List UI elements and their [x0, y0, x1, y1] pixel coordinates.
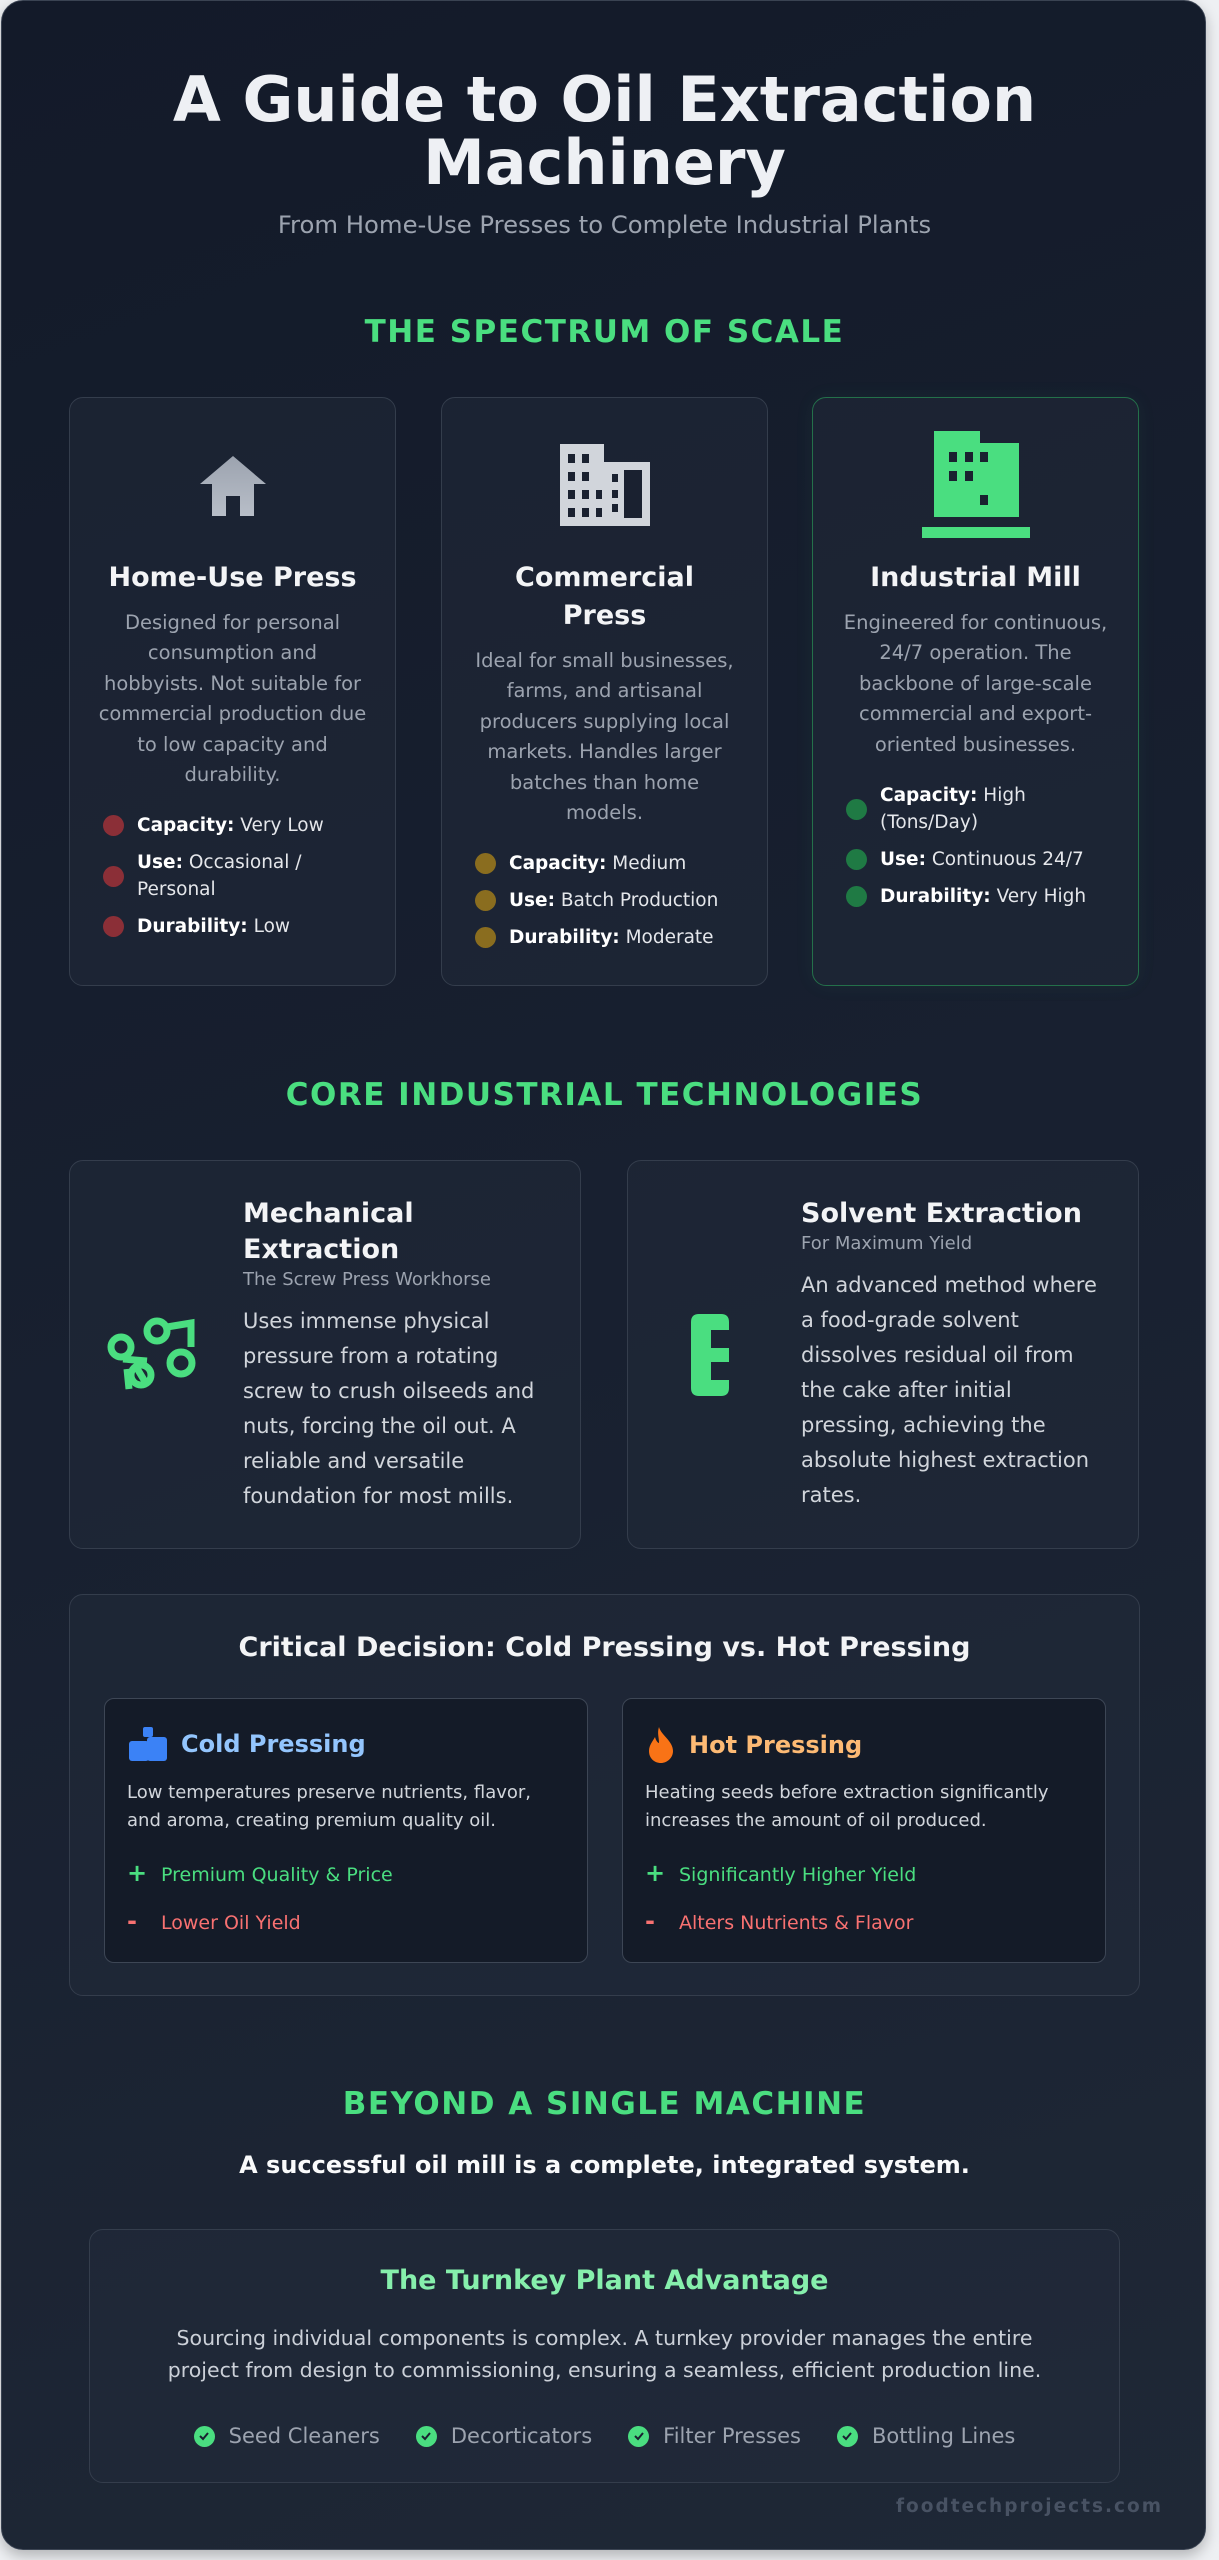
icon: industrial building	[922, 431, 1030, 538]
text: solvent extraction: Solvent Extraction	[801, 1198, 1082, 1229]
text: industrial mill: Durability: Very High	[880, 886, 1086, 907]
heading: cold pressing with icon: Cold Pressing	[181, 1730, 366, 1758]
checklist: Bottling Lines	[872, 2424, 1015, 2448]
text: home-use press: Durability: Low	[137, 916, 290, 937]
panel: cold vs hot pressing	[69, 1594, 1140, 1996]
pro: Significantly Higher Yield	[679, 1864, 916, 1886]
heading: beyond a single machine: BEYOND A SINGLE MACHINE	[343, 2086, 866, 2122]
pro: +	[645, 1859, 665, 1887]
subheading: A successful oil mill is a complete, integrated system.	[239, 2151, 970, 2179]
text: industrial mill: Industrial Mill	[870, 562, 1081, 593]
con	[127, 1907, 301, 1935]
panel: commercial press	[441, 397, 768, 986]
panel: home-use press	[69, 397, 396, 986]
text: mechanical extraction: Uses immense physical pressure from a rotating screw to crush oilseeds and nuts, forcing the oil out. A reliable and versatile foundation for most mills.	[243, 1309, 534, 1508]
panel: industrial mill	[812, 397, 1139, 986]
icon: house	[200, 456, 266, 516]
pro: Premium Quality & Price	[161, 1864, 393, 1886]
text: commercial press: Durability: Moderate	[509, 927, 714, 948]
heading: cold pressing with icon	[129, 1727, 366, 1761]
icon: building	[560, 444, 650, 526]
heading: hot pressing with icon: Hot Pressing	[689, 1731, 862, 1759]
text: commercial press	[475, 562, 734, 948]
checklist: Seed Cleaners	[229, 2424, 380, 2448]
text: solvent extraction: For Maximum Yield	[801, 1233, 972, 1254]
text: industrial mill	[844, 562, 1107, 907]
text: industrial mill: Engineered for continuous, 24/7 operation. The backbone of large-scale commercial and export-oriented businesses.	[844, 611, 1107, 756]
text: home-use press: Designed for personal consumption and hobbyists. Not suitable for commercial production due to low capacity and durability.	[99, 611, 366, 786]
title: A Guide to Oil Extraction	[173, 63, 1036, 136]
con: -	[645, 1907, 655, 1935]
pro	[645, 1859, 916, 1887]
text: commercial press: Press	[563, 600, 646, 631]
text: commercial press: Use: Batch Production	[509, 890, 718, 911]
con: Alters Nutrients & Flavor	[679, 1912, 913, 1934]
heading: core technologies: CORE INDUSTRIAL TECHNOLOGIES	[286, 1077, 923, 1113]
text: mechanical extraction	[242, 1198, 534, 1508]
text: home-use press: Home-Use Press	[108, 562, 357, 593]
icon: solvent	[691, 1314, 729, 1396]
panel: mechanical extraction	[69, 1160, 581, 1549]
pro: +	[127, 1859, 147, 1887]
text: mechanical extraction: The Screw Press Workhorse	[243, 1269, 491, 1290]
con	[645, 1907, 914, 1935]
text: industrial mill: Use: Continuous 24/7	[880, 849, 1084, 870]
pro	[127, 1859, 393, 1887]
text: home-use press	[99, 562, 366, 937]
turnkey description: Sourcing individual components is complex. A turnkey provider manages the entire project from design to commissioning, ensuring a seamless, efficient production line.	[168, 2326, 1041, 2382]
heading: spectrum of scale: THE SPECTRUM OF SCALE	[365, 314, 844, 350]
turnkey title: The Turnkey Plant Advantage	[381, 2265, 828, 2296]
panel: solvent extraction	[627, 1160, 1139, 1549]
card: hot pressing	[622, 1698, 1106, 1963]
text: mechanical extraction: Mechanical	[243, 1198, 414, 1229]
card: hot pressing: Heating seeds before extraction significantly increases the amount of oil produced.	[645, 1782, 1049, 1831]
text: commercial press: Commercial	[515, 562, 694, 593]
title: Machinery	[423, 126, 786, 199]
icon: gears	[108, 1318, 196, 1390]
footer: source: foodtechprojects.com	[896, 2496, 1163, 2517]
con: -	[127, 1907, 137, 1935]
text: home-use press: Capacity: Very Low	[137, 815, 324, 836]
subtitle: From Home-Use Presses to Complete Industrial Plants	[278, 210, 931, 239]
card: cold pressing	[104, 1698, 588, 1963]
text: solvent extraction: An advanced method where a food-grade solvent dissolves residual oil from the cake after initial pressing, achieving the absolute highest extraction rates.	[801, 1273, 1097, 1507]
checklist: Decorticators	[451, 2424, 592, 2448]
title	[173, 63, 1036, 199]
heading: critical decision: Critical Decision: Cold Pressing vs. Hot Pressing	[239, 1632, 970, 1663]
text: industrial mill: Capacity: High (Tons/Day)	[880, 785, 1026, 833]
checklist: Filter Presses	[663, 2424, 801, 2448]
card: cold pressing: Low temperatures preserve nutrients, flavor, and aroma, creating premium quality oil.	[127, 1782, 531, 1831]
text: mechanical extraction: Extraction	[243, 1234, 399, 1265]
heading: hot pressing with icon	[649, 1727, 862, 1763]
text: commercial press: Ideal for small businesses, farms, and artisanal producers supplying local markets. Handles larger batches than home models.	[475, 649, 734, 824]
checklist	[194, 2424, 1015, 2448]
panel: turnkey plant advantage	[89, 2229, 1120, 2483]
text: commercial press: Capacity: Medium	[509, 853, 686, 874]
text: home-use press: Use: Occasional / Personal	[137, 852, 302, 900]
con: Lower Oil Yield	[161, 1912, 301, 1934]
